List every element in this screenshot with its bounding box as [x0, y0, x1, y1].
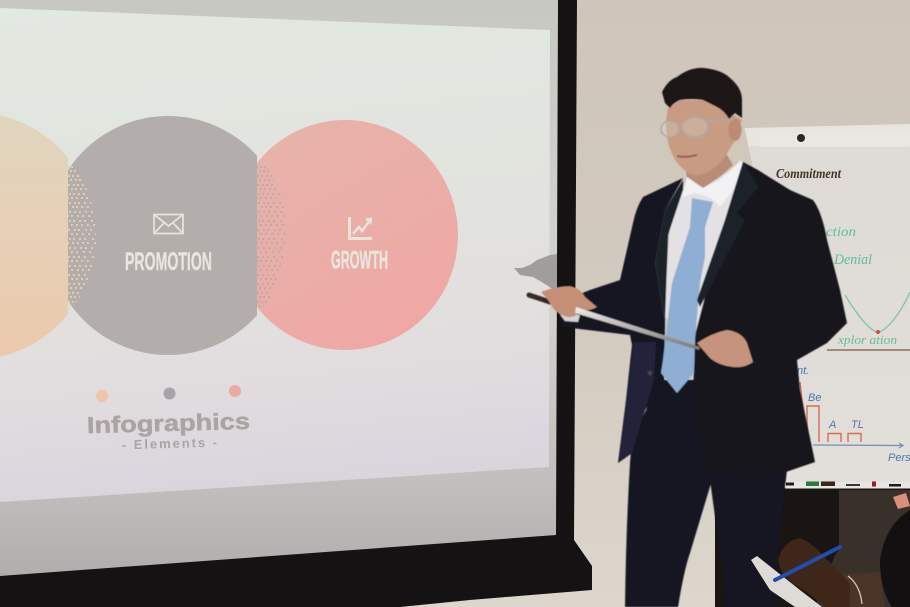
subtitle: elements: - Elements -: [122, 435, 217, 452]
brown rule: [827, 349, 910, 351]
left hand: [541, 286, 597, 317]
projected slide: [0, 8, 550, 502]
projector screen: [0, 0, 592, 607]
title: infographics: Infographics: [87, 408, 250, 438]
handwritten: blue labels: TL: [851, 419, 864, 431]
handwritten: commitment: Commitment: [776, 167, 842, 182]
red marker: [876, 330, 880, 334]
shirt: [664, 162, 743, 345]
lapel: [697, 162, 758, 307]
jacket button: [648, 370, 652, 376]
jacket left skirt highlight: [618, 342, 656, 463]
slide: tan circle: [0, 105, 96, 365]
shirt cuff: [558, 312, 580, 322]
trousers left leg: [625, 380, 712, 607]
board frame: [745, 124, 910, 488]
presenter hand shadow: [514, 254, 557, 292]
pointer handle: [529, 295, 550, 302]
whiteboard: [715, 124, 910, 607]
person shoulder: [880, 510, 910, 607]
face: [666, 100, 742, 175]
chair back: [835, 572, 885, 607]
jacket main body: [693, 162, 847, 482]
axis arrow: [813, 443, 903, 448]
pointer rod: [575, 307, 700, 350]
label: growth: GROWTH: [331, 246, 388, 274]
right hand: [697, 330, 753, 367]
marker held by neighbour: [893, 493, 910, 509]
handwritten: exploration: xplor ation: [837, 332, 897, 347]
ear: [728, 119, 742, 141]
dark furniture below board: [715, 488, 910, 607]
label: promotion: PROMOTION: [125, 248, 212, 276]
trousers right leg: [705, 420, 787, 607]
hair: [662, 68, 742, 119]
handwritten: blue labels: Be: [808, 392, 821, 404]
blue pen: [775, 547, 840, 580]
hand: [778, 538, 850, 607]
brown furniture panel: [815, 490, 910, 607]
seated person: [751, 493, 910, 607]
lapel left: [655, 180, 683, 323]
glasses: [661, 117, 733, 137]
tie: [661, 198, 713, 393]
handwritten: action: ction: [826, 225, 856, 240]
slide: gray circle: [68, 116, 286, 355]
bracelet: [848, 576, 862, 604]
mouth: [677, 155, 697, 157]
icon: growth chart: [350, 217, 372, 238]
screen surface: [0, 0, 558, 576]
red bars: [800, 382, 861, 442]
board top clip rail: [759, 133, 910, 147]
screen black frame: [0, 0, 592, 607]
collar: [682, 160, 743, 207]
neck: [685, 150, 733, 195]
handwritten: blue labels: nt.: [797, 365, 809, 377]
handwritten: blue labels: A: [828, 419, 836, 431]
board surface: [750, 144, 910, 482]
marker tray: [785, 482, 910, 488]
slide: pink circle: [232, 120, 458, 350]
presenter: [529, 68, 847, 607]
icon: envelope: [154, 214, 183, 234]
handwritten: denial: Denial: [833, 252, 872, 268]
handwritten: blue labels: [797, 365, 910, 464]
bell curve: [845, 292, 910, 333]
jacket sleeve and left panel: [560, 178, 683, 463]
legend dots: [96, 385, 241, 402]
magnet: [797, 134, 805, 142]
notebook: [751, 556, 822, 607]
